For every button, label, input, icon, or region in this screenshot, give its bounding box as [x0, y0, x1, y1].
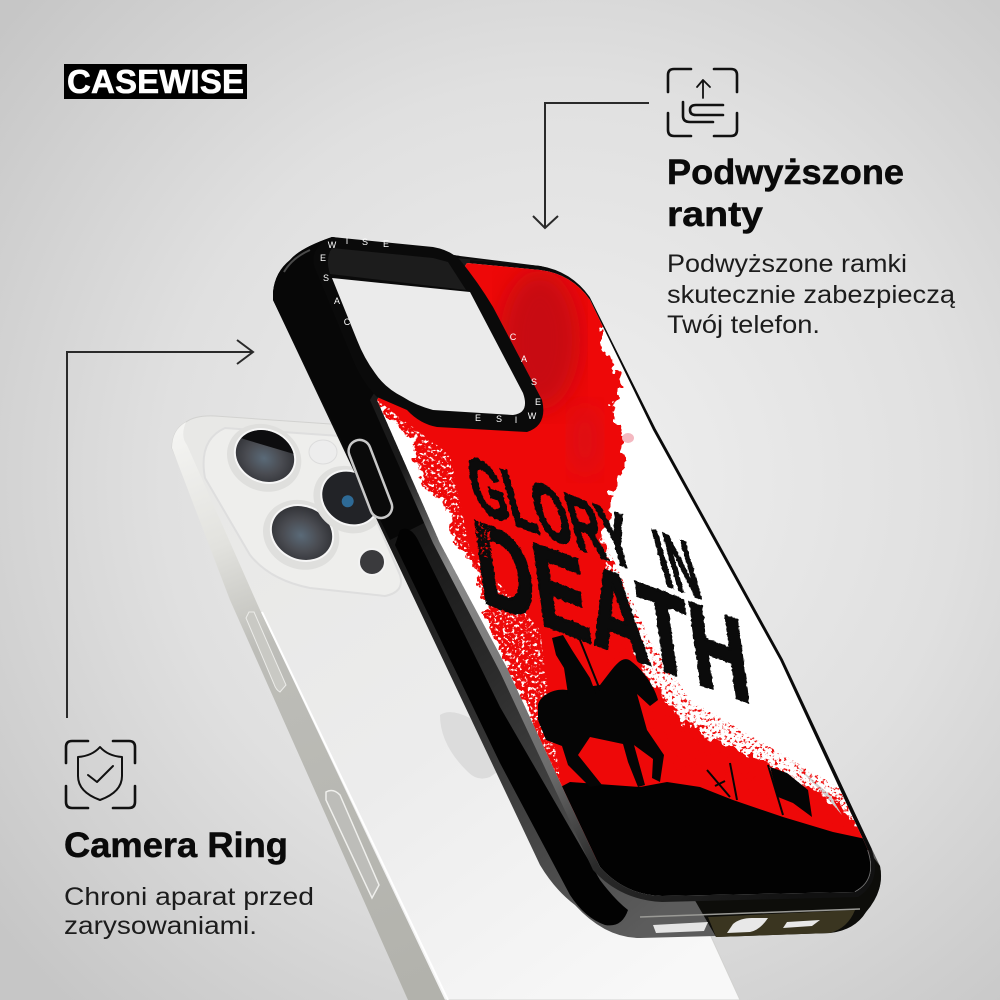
- red paint: [370, 250, 880, 860]
- in: IN: [644, 511, 709, 618]
- usb port: [727, 918, 768, 933]
- arrow: raised edges: [533, 103, 649, 228]
- flag pole: [768, 765, 783, 815]
- ring outer: [313, 237, 543, 432]
- lance: [572, 620, 600, 690]
- ring letters: I: [515, 415, 517, 425]
- ring letters: [320, 236, 541, 425]
- sensor: [360, 550, 384, 574]
- band highlight: [262, 612, 448, 1000]
- ring letters: S: [323, 273, 329, 283]
- flag: [770, 767, 812, 817]
- white speckles left: [370, 395, 560, 780]
- ring letters: E: [320, 253, 326, 263]
- ring letters: E: [383, 239, 389, 249]
- ring letters: W: [328, 240, 337, 250]
- grain on lettering: [474, 519, 492, 558]
- ring letters: S: [531, 377, 537, 387]
- ring letters: S: [496, 414, 502, 424]
- corner highlight: [284, 250, 310, 272]
- text: camera ring description: [64, 883, 314, 940]
- button pill: [345, 437, 395, 521]
- text: raised edges description: [667, 250, 955, 339]
- horse and rider: [538, 620, 664, 787]
- ring letters: W: [528, 411, 537, 421]
- inner bezel: [370, 258, 875, 902]
- pole: [730, 763, 737, 800]
- text: camera ring description: Chroni aparat przed: [64, 883, 314, 911]
- ring hole: [332, 278, 525, 415]
- speaker left: [653, 922, 708, 933]
- ring letters: C: [344, 317, 351, 327]
- side slot: [395, 529, 628, 925]
- power button: [326, 791, 379, 898]
- ring letters: C: [510, 332, 517, 342]
- death: DEATH: [466, 494, 758, 730]
- white phone behind case: [172, 412, 740, 1000]
- speaker right: [783, 920, 820, 928]
- grey wash: [790, 760, 842, 815]
- heading: raised edges: Podwyższone: [667, 153, 904, 192]
- button cutout frame: [345, 437, 395, 521]
- icon: raised edges: [668, 69, 737, 136]
- camera plateau: [204, 428, 401, 596]
- rider: [552, 635, 593, 690]
- heading: raised edges: ranty: [667, 195, 764, 234]
- dark red clouds: [500, 270, 580, 410]
- camera ring: [313, 236, 543, 432]
- white base: [370, 250, 890, 910]
- camera lenses: [227, 424, 384, 574]
- lens 2: [263, 500, 340, 570]
- lens 3: [314, 466, 376, 534]
- flash: [309, 440, 337, 464]
- ring letters: E: [475, 413, 481, 423]
- pink speck: [622, 433, 634, 443]
- bottom port openings: [653, 918, 820, 933]
- upper black shade: [273, 237, 460, 540]
- text: raised edges description: skutecznie zabezpieczą: [667, 281, 955, 309]
- right black section: [693, 850, 881, 937]
- heading: camera ring: Camera Ring: [64, 826, 288, 865]
- heading: raised edges: [667, 153, 904, 234]
- right edge black line: [470, 262, 870, 850]
- text: camera ring description: zarysowaniami.: [64, 912, 257, 940]
- phone back face: [172, 416, 740, 1000]
- apple logo: [440, 712, 500, 779]
- olive bottom section: [708, 910, 855, 937]
- case artwork: glory in death: [370, 250, 890, 910]
- hole inner shade: [328, 248, 466, 290]
- case body: [273, 237, 881, 938]
- volume button: [246, 612, 286, 692]
- icon: shield with check: [66, 741, 135, 808]
- phone side band: [172, 422, 445, 1000]
- text: raised edges description: Podwyższone ramki: [667, 250, 907, 278]
- arrow: camera ring: [67, 340, 253, 718]
- headline text: [468, 457, 750, 704]
- horse: [538, 659, 664, 787]
- ring letters: S: [362, 237, 368, 247]
- black protective case: [273, 237, 881, 938]
- logo: casewise: CASEWISE: [67, 63, 244, 100]
- black ground: [562, 782, 871, 896]
- crosses and flag: [707, 763, 812, 817]
- ring letters: A: [521, 354, 527, 364]
- red speckles right: [600, 530, 860, 840]
- text: raised edges description: Twój telefon.: [667, 311, 820, 339]
- sword: [707, 770, 730, 797]
- bottom right highlight: [855, 850, 871, 892]
- glory: GLORY: [457, 437, 644, 590]
- bottom highlight line: [640, 909, 860, 917]
- ring letters: A: [334, 296, 340, 306]
- ring letters: E: [535, 397, 541, 407]
- lens 1: [227, 424, 302, 492]
- ring letters: I: [346, 236, 348, 246]
